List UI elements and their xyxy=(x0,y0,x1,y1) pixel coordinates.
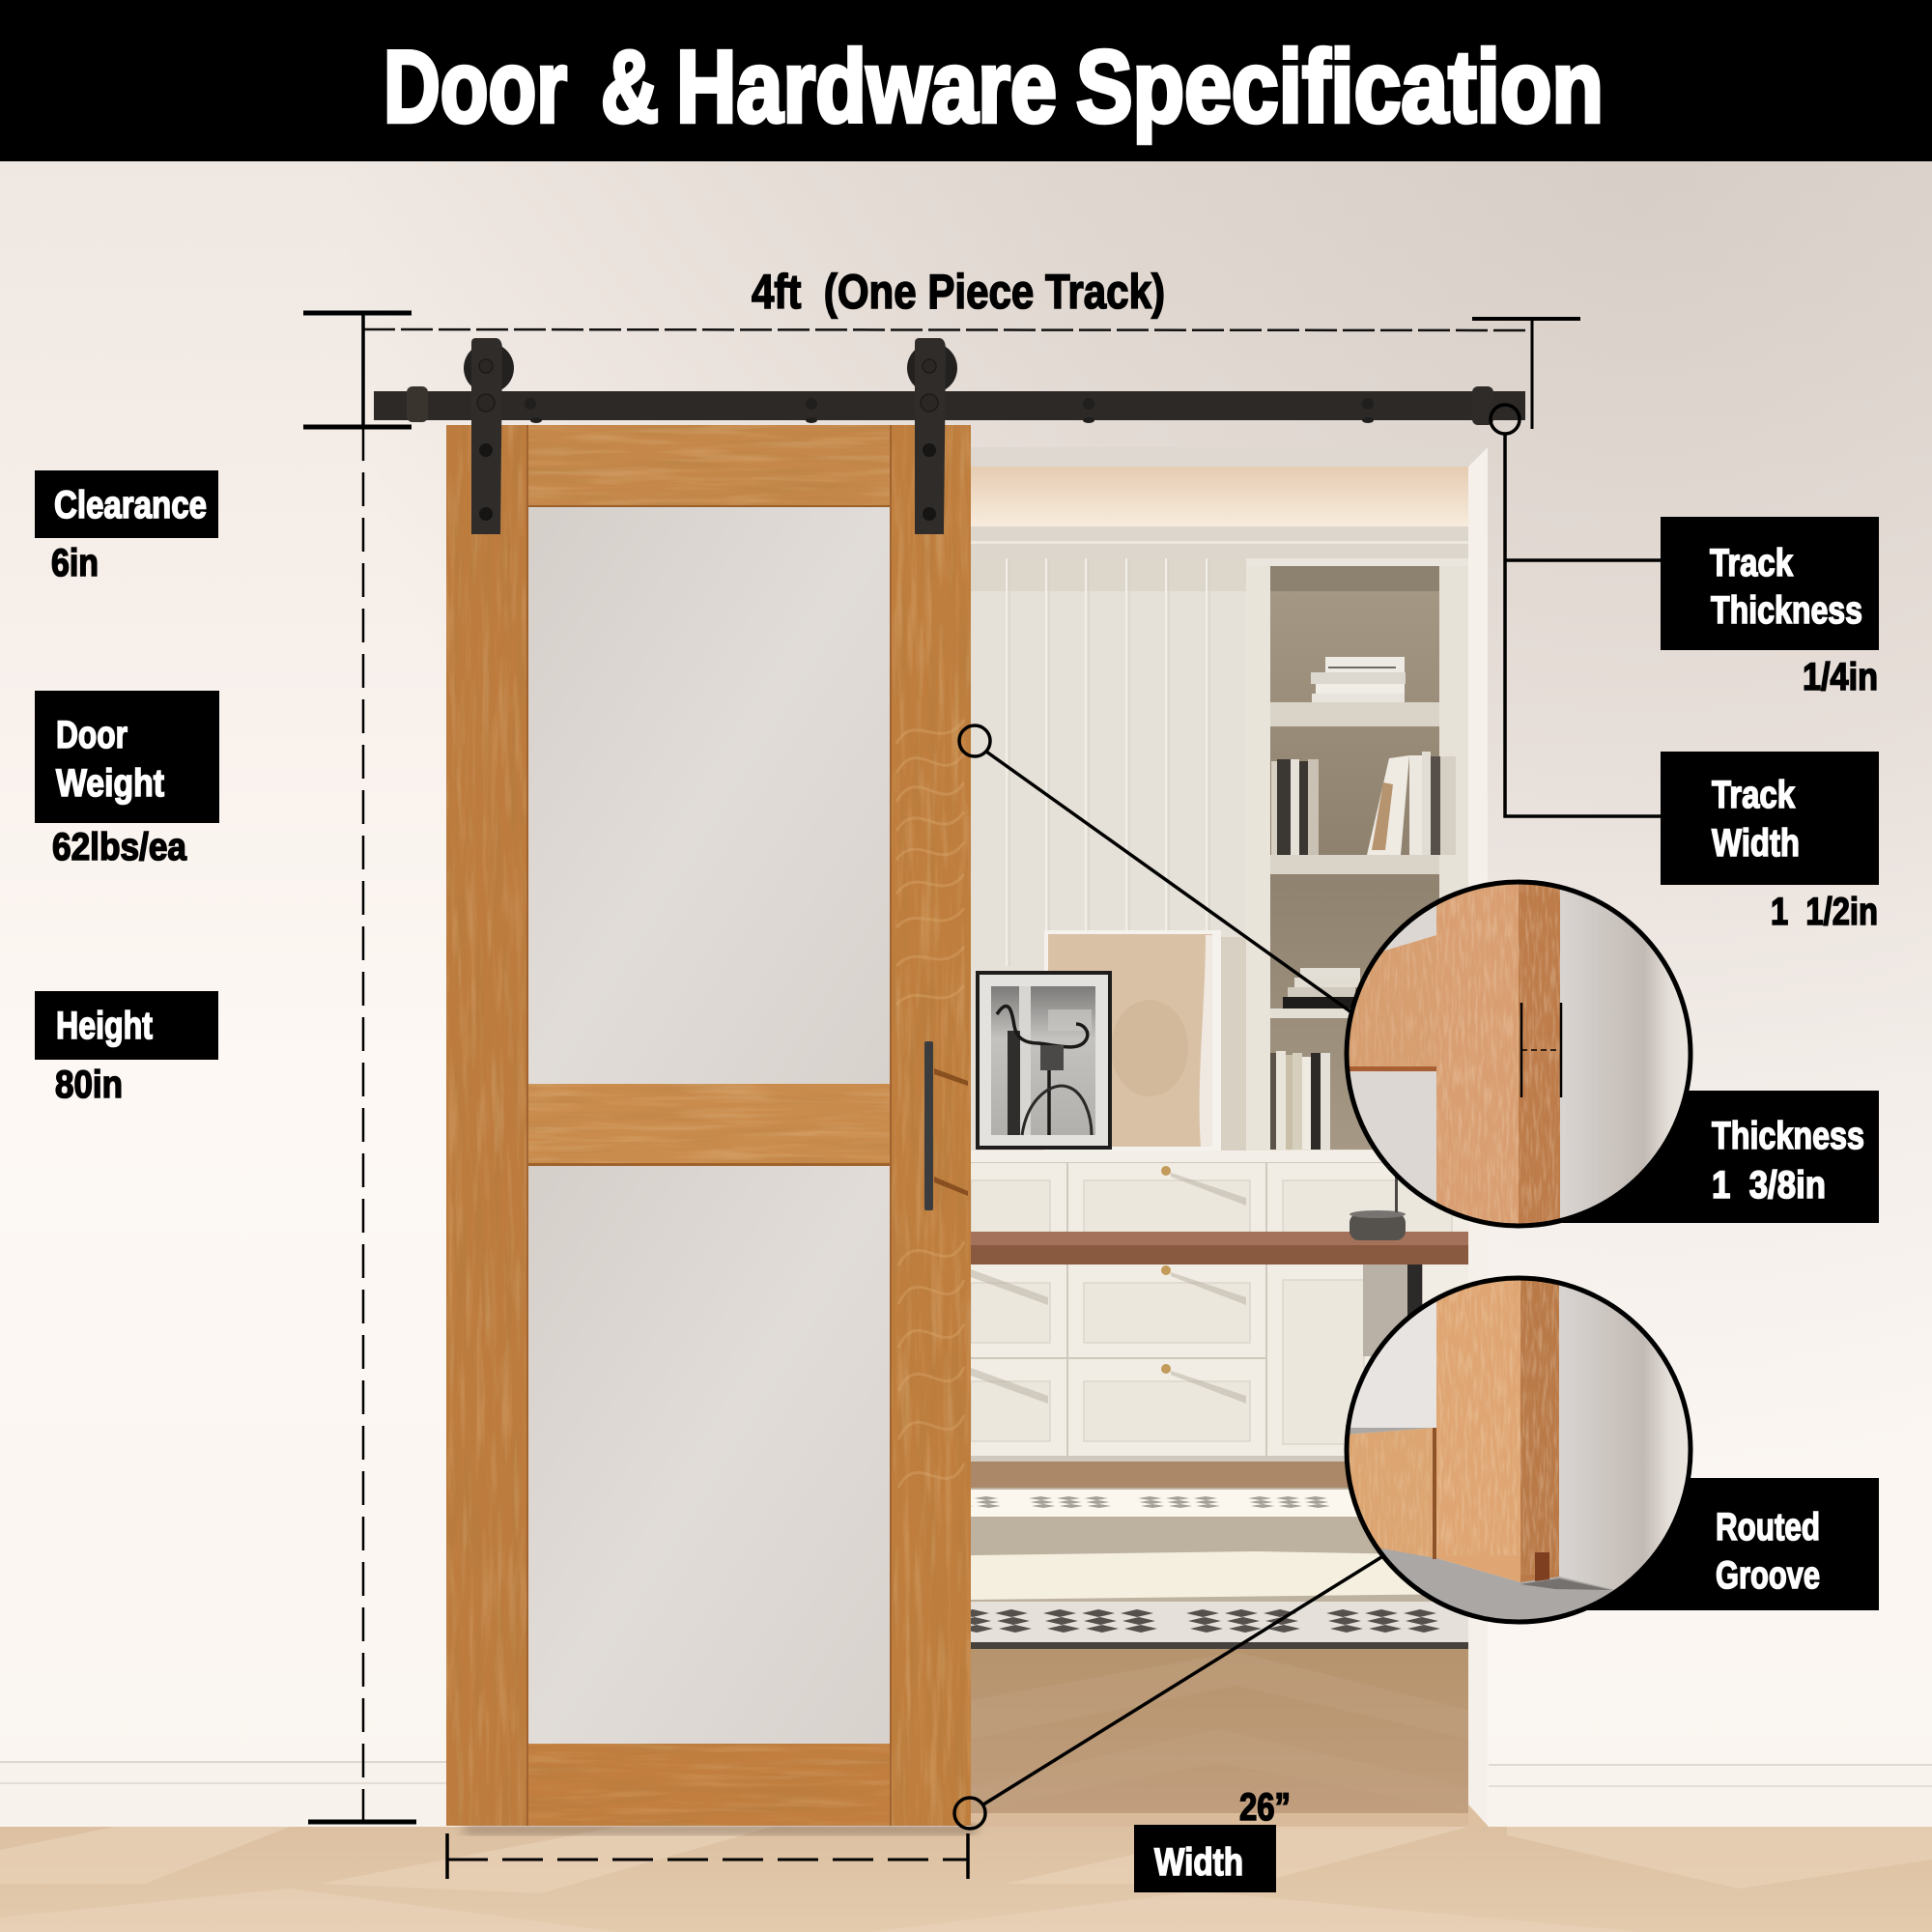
interior floor herringbone xyxy=(971,1652,1468,1811)
track thickness label: Thickness xyxy=(1711,589,1862,632)
routed groove label: Groove xyxy=(1716,1554,1820,1597)
books: shelf 2 xyxy=(1271,752,1456,855)
bottom rail xyxy=(528,1744,890,1826)
panelled wall xyxy=(971,558,1246,1157)
height label: 80in xyxy=(55,1064,123,1106)
routed groove label xyxy=(1546,1478,1879,1610)
routed groove label: Routed xyxy=(1716,1506,1820,1548)
width label: 26” xyxy=(1239,1786,1291,1829)
right stile xyxy=(890,425,971,1826)
framed bicycle photo xyxy=(976,971,1112,1150)
thickness label xyxy=(1546,1091,1879,1223)
track width label: Width xyxy=(1712,822,1800,865)
books: shelf 3 xyxy=(1283,968,1360,1009)
rail close-up xyxy=(1343,935,1436,1071)
clearance dimension xyxy=(303,313,412,427)
barn door xyxy=(446,425,971,1826)
bowl on desk xyxy=(1350,1164,1406,1240)
stile edge close-up xyxy=(1519,879,1560,1227)
top rail xyxy=(528,425,890,507)
interior floor xyxy=(971,1462,1468,1813)
track width label: Track xyxy=(1712,774,1796,816)
books: shelf 1 xyxy=(1311,657,1406,702)
height label: Height xyxy=(56,1005,153,1047)
door weight label: Door xyxy=(56,714,128,756)
brass knobs xyxy=(1161,1166,1171,1374)
right hanger strap xyxy=(907,338,957,534)
height label xyxy=(35,991,218,1106)
white cabinets and drawers xyxy=(971,1151,1468,1462)
track stop right xyxy=(1472,386,1493,425)
stile close-up xyxy=(1436,879,1519,1227)
leader lines to detail circles xyxy=(954,725,1381,1829)
thickness marks xyxy=(1521,1003,1561,1097)
bookcase xyxy=(1246,566,1468,1155)
wooden desk xyxy=(971,1232,1468,1324)
track thickness label: 1/4in xyxy=(1803,656,1878,698)
thickness label: 1 3/8in xyxy=(1712,1164,1826,1207)
sliding track xyxy=(374,386,1525,425)
door handle xyxy=(924,1041,968,1210)
title: Door xyxy=(384,30,567,144)
track thickness label: Track xyxy=(1710,542,1794,584)
title banner xyxy=(0,0,1932,161)
track length dimension: 4ft (One Piece Track) xyxy=(752,265,1165,319)
title: & xyxy=(601,30,659,144)
door weight label xyxy=(35,691,219,868)
door frame trim xyxy=(971,447,1489,1827)
clearance label: Clearance xyxy=(54,484,207,526)
width label xyxy=(1134,1786,1291,1892)
floor xyxy=(0,1827,1932,1932)
patterned rug xyxy=(918,1488,1468,1649)
crown moulding xyxy=(971,526,1468,558)
track stop left xyxy=(407,386,428,422)
clearance label xyxy=(35,470,218,584)
stile edge and groove xyxy=(1520,1275,1559,1582)
title xyxy=(384,30,1604,144)
width label: Width xyxy=(1154,1841,1243,1884)
ceiling glow xyxy=(971,467,1468,526)
stile close-up xyxy=(1433,1275,1520,1582)
title: Hardware xyxy=(676,30,1057,144)
height dimension xyxy=(308,427,416,1822)
glass panel lower xyxy=(527,1164,891,1746)
floor close-up xyxy=(1380,1548,1615,1619)
door weight label: Weight xyxy=(56,762,164,805)
left stile xyxy=(446,425,528,1826)
detail circle: routed groove xyxy=(1343,1275,1700,1633)
books: shelf 4 xyxy=(1270,1051,1330,1150)
middle rail xyxy=(528,1084,890,1166)
detail circle: door thickness xyxy=(1343,879,1700,1227)
thickness label: Thickness xyxy=(1712,1115,1864,1157)
clearance label: 6in xyxy=(51,542,99,584)
track width label xyxy=(1661,752,1879,933)
leaning beige art print xyxy=(1044,930,1246,1151)
door shadow on floor xyxy=(464,1824,976,1834)
track width label: 1 1/2in xyxy=(1771,891,1878,933)
door weight label: 62lbs/ea xyxy=(52,826,187,868)
track thickness label xyxy=(1661,517,1879,698)
room seen through the doorway xyxy=(918,447,1468,1827)
width dimension xyxy=(447,1833,968,1879)
title: Specification xyxy=(1076,30,1604,144)
rail close-up xyxy=(1349,1428,1433,1557)
baseboard xyxy=(0,1761,1932,1827)
track callout lines xyxy=(1491,405,1661,816)
glass panel upper xyxy=(527,507,891,1087)
left hanger strap xyxy=(464,338,514,534)
